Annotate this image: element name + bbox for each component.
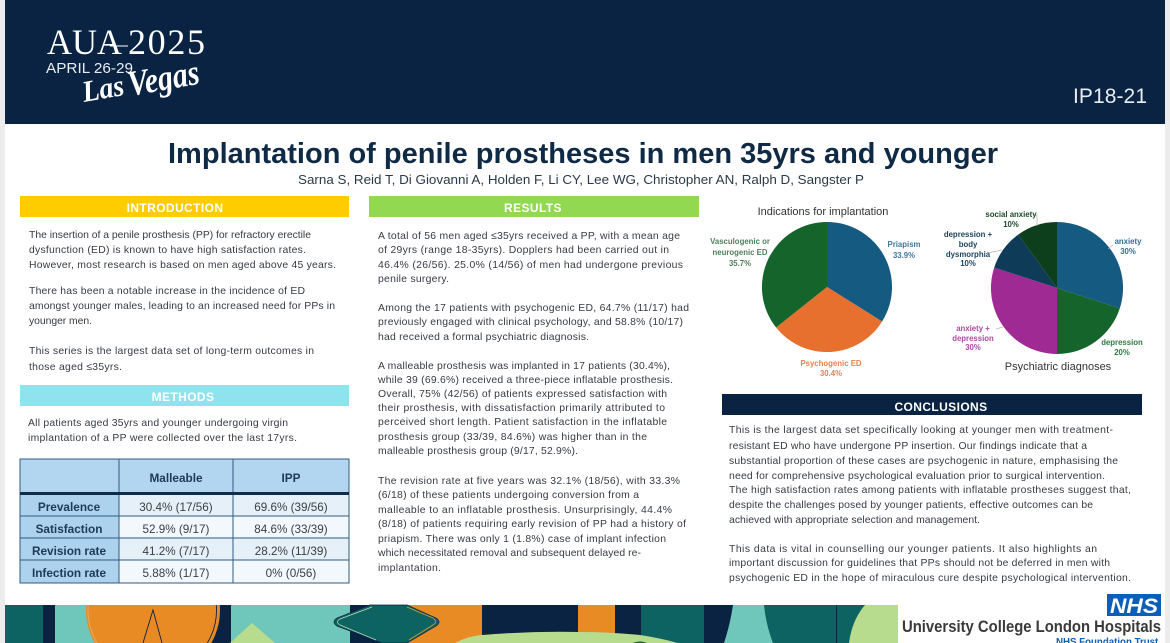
panel: conclusions xyxy=(722,394,1142,584)
row: satisfaction: 52.9% (9/17) xyxy=(143,523,210,536)
label: psychogenic ED: 30.4% xyxy=(820,369,842,378)
results text: The revision rate at five years was 32.1% (18/56), with 33.3% xyxy=(378,476,680,487)
slice: depression xyxy=(1057,288,1120,354)
panel: methods xyxy=(20,385,349,444)
poster code: IP18-21 xyxy=(1073,85,1147,108)
results text: perceived short length. Patient satisfaction in the inflatable xyxy=(378,417,667,428)
row: revision rate: Revision rate xyxy=(32,544,106,558)
methods text: implantation of a PP were collected over the last 17yrs. xyxy=(28,433,297,444)
results text: of 29yrs (range 18-35yrs). Dopplers had been carried out in xyxy=(378,245,669,256)
panel: conclusions: CONCLUSIONS xyxy=(894,400,988,414)
results text: A total of 56 men aged ≤35yrs received a PP, with a mean age xyxy=(378,231,680,242)
label: depression: 20% xyxy=(1114,348,1130,357)
row: infection rate: Infection rate xyxy=(32,566,106,580)
results text: previously engaged with clinical psychology, and 58.8% (10/17) xyxy=(378,317,683,328)
introduction text: amongst younger males, leading to an increased need for PPs in xyxy=(29,301,335,312)
footer decorative art xyxy=(5,605,898,643)
row: prevalence: 69.6% (39/56) xyxy=(254,501,328,514)
results text: Overall, 75% (42/56) of patients expressed satisfaction with xyxy=(378,389,667,400)
panel: introduction xyxy=(20,196,349,373)
conclusions text: achieved with appropriate selection and management. xyxy=(729,515,980,526)
authors: Sarna S, Reid T, Di Giovanni A, Holden F, Li CY, Lee WG, Christopher AN, Ralph D, Sangster P xyxy=(298,172,864,187)
label: depression + body dysmorphia: dysmorphia xyxy=(946,250,991,259)
AUA 2025 logo: Vegas xyxy=(124,52,202,104)
introduction text: those aged ≤35yrs. xyxy=(29,362,122,373)
introduction text: dysfunction (ED) is known to have high satisfaction rates. xyxy=(29,245,306,256)
label: anxiety + depression: anxiety + xyxy=(956,324,990,333)
label: depression + body dysmorphia: body xyxy=(959,240,978,249)
AUA 2025 logo: 2025 xyxy=(128,22,205,62)
slice: anxiety + depression xyxy=(991,268,1057,354)
pie chart: indications for implantation: Indications for implantation xyxy=(758,206,888,218)
results text: penile surgery. xyxy=(378,274,449,285)
results text: Among the 17 patients with psychogenic ED, 64.7% (11/17) had xyxy=(378,303,689,314)
label: psychogenic ED xyxy=(800,359,862,378)
results text: while 39 (69.6%) received a three-piece inflatable prosthesis. xyxy=(377,375,673,386)
conclusions text: need for comprehensive psychological evaluation prior to surgical intervention. xyxy=(729,471,1105,482)
row: infection rate: 5.88% (1/17) xyxy=(143,567,210,580)
table header xyxy=(149,471,301,485)
label: anxiety: 30% xyxy=(1120,247,1136,256)
label: vasculogenic or neurogenic ED: neurogenic ED xyxy=(712,248,768,257)
pie chart: psychiatric diagnoses xyxy=(944,210,1143,373)
conclusions text xyxy=(729,425,1131,584)
label: anxiety + depression: depression xyxy=(952,334,994,343)
label: vasculogenic or neurogenic ED xyxy=(710,237,770,268)
icon: NHS lozenge xyxy=(1107,594,1161,616)
conclusions text: substantial proportion of these cases are psychogenic in nature, emphasising the xyxy=(729,456,1118,467)
slice: priapism xyxy=(827,222,892,322)
label: priapism: Priapism xyxy=(888,240,921,249)
panel: results: RESULTS xyxy=(504,201,562,215)
introduction text: younger men. xyxy=(29,316,92,327)
introduction text: The insertion of a penile prosthesis (PP) for refractory erectile xyxy=(29,230,311,241)
pie chart: psychiatric diagnoses: Psychiatric diagnoses xyxy=(1005,361,1112,373)
AUA 2025 logo: AUA xyxy=(47,22,122,62)
label: anxiety xyxy=(1115,237,1142,256)
conclusions text: despite the challenges posed by younger patients, effective outcomes can be xyxy=(729,500,1093,511)
label: social anxiety: social anxiety xyxy=(985,210,1037,219)
conclusions text: resistant ED who have undergone PP insertion. Our findings indicate that a xyxy=(729,441,1087,452)
label: anxiety + depression: 30% xyxy=(965,343,981,352)
results text: 46.4% (26/56). 25.0% (14/56) of men had undergone previous xyxy=(378,260,683,271)
panel: results xyxy=(369,196,699,574)
AUA 2025 logo xyxy=(46,22,205,109)
label: psychogenic ED: Psychogenic ED xyxy=(800,359,862,368)
header banner xyxy=(5,0,1165,124)
label: depression: depression xyxy=(1101,338,1143,347)
results text: implantation. xyxy=(378,563,441,574)
row: revision rate xyxy=(32,544,327,558)
results text: which necessitated removal and subsequent delayed re- xyxy=(377,548,641,559)
row: infection rate xyxy=(32,566,316,580)
slice: depression + body dysmorphia xyxy=(994,235,1057,288)
NHS trust logo xyxy=(902,594,1161,636)
row: prevalence xyxy=(38,500,328,514)
AUA 2025 logo: APRIL 26-29 xyxy=(46,60,133,77)
results text: malleable to an inflatable prosthesis. Unsurprisingly, 44.4% xyxy=(378,505,672,516)
results text: (6/18) of these patients undergoing conversion from a xyxy=(378,490,639,501)
row: revision rate: 41.2% (7/17) xyxy=(143,545,210,558)
NHS trust logo: NHS xyxy=(1110,595,1158,618)
row: revision rate: 28.2% (11/39) xyxy=(255,545,327,558)
conclusions text: psychogenic ED in the hope of miraculous cure despite psychological intervention. xyxy=(729,573,1131,584)
slice: psychogenic ED xyxy=(776,287,882,352)
introduction text: There has been a notable increase in the incidence of ED xyxy=(29,286,305,297)
conclusions text: This is the largest data set specifically looking at younger men with treatment- xyxy=(729,425,1113,436)
results text: their prosthesis, with dissatisfaction primarily attributed to xyxy=(378,403,665,414)
row: prevalence: 30.4% (17/56) xyxy=(139,501,213,514)
label: depression + body dysmorphia: 10% xyxy=(960,259,976,268)
row: prevalence: Prevalence xyxy=(38,500,101,514)
conclusions text: This data is vital in counselling our younger patients. It also highlights an xyxy=(729,544,1097,555)
label: priapism: 33.9% xyxy=(893,251,915,260)
conclusions text: important discussion for guidelines that PPs should not be deferred in men with xyxy=(729,558,1110,569)
results text: malleable prosthesis group (9/17, 52.9%). xyxy=(378,446,578,457)
comparison table xyxy=(20,459,349,583)
table header: IPP xyxy=(281,471,301,485)
label: vasculogenic or neurogenic ED: Vasculogenic or xyxy=(710,237,770,246)
label: depression xyxy=(1101,338,1143,357)
results text: A malleable prosthesis was implanted in 17 patients (30.4%), xyxy=(378,361,670,372)
slice: social anxiety xyxy=(1018,222,1057,288)
introduction text: However, most research is based on men aged above 45 years. xyxy=(29,260,336,271)
results text: (8/18) of patients requiring early revision of PP had a history of xyxy=(378,519,686,530)
label: depression + body dysmorphia xyxy=(944,230,993,268)
panel: introduction: INTRODUCTION xyxy=(127,201,223,215)
row: satisfaction xyxy=(36,522,328,536)
panel: methods: METHODS xyxy=(152,390,214,404)
table header: Malleable xyxy=(149,471,203,485)
methods text: All patients aged 35yrs and younger undergoing virgin xyxy=(28,418,288,429)
results text: prosthesis group (33/39, 84.6%) was higher than in the xyxy=(378,432,647,443)
pie chart: indications for implantation xyxy=(710,206,921,378)
results text: had received a formal psychiatric diagnosis. xyxy=(378,332,589,343)
label: social anxiety: 10% xyxy=(1003,220,1019,229)
label: vasculogenic or neurogenic ED: 35.7% xyxy=(729,259,751,268)
conclusions text: The high satisfaction rates among patients with inflatable prostheses suggest that, xyxy=(729,485,1131,496)
AUA 2025 logo: Las xyxy=(79,69,127,109)
label: depression + body dysmorphia: depression + xyxy=(944,230,993,239)
row: satisfaction: 84.6% (33/39) xyxy=(254,523,328,536)
row: satisfaction: Satisfaction xyxy=(36,522,102,536)
label: social anxiety xyxy=(985,210,1037,229)
title: Implantation of penile prostheses in men 35yrs and younger xyxy=(168,138,998,170)
results text xyxy=(377,231,689,574)
slice: vasculogenic or neurogenic ED xyxy=(762,222,827,328)
results text: priapism. There was only 1 (1.8%) case of implant infection xyxy=(378,534,666,545)
row: infection rate: 0% (0/56) xyxy=(266,567,316,580)
introduction text: This series is the largest data set of long-term outcomes in xyxy=(29,346,314,357)
label: anxiety + depression xyxy=(952,324,994,352)
label: anxiety: anxiety xyxy=(1115,237,1142,246)
introduction text xyxy=(29,230,336,373)
slice: anxiety xyxy=(1057,222,1123,308)
label: priapism xyxy=(888,240,921,260)
methods text xyxy=(28,418,297,444)
